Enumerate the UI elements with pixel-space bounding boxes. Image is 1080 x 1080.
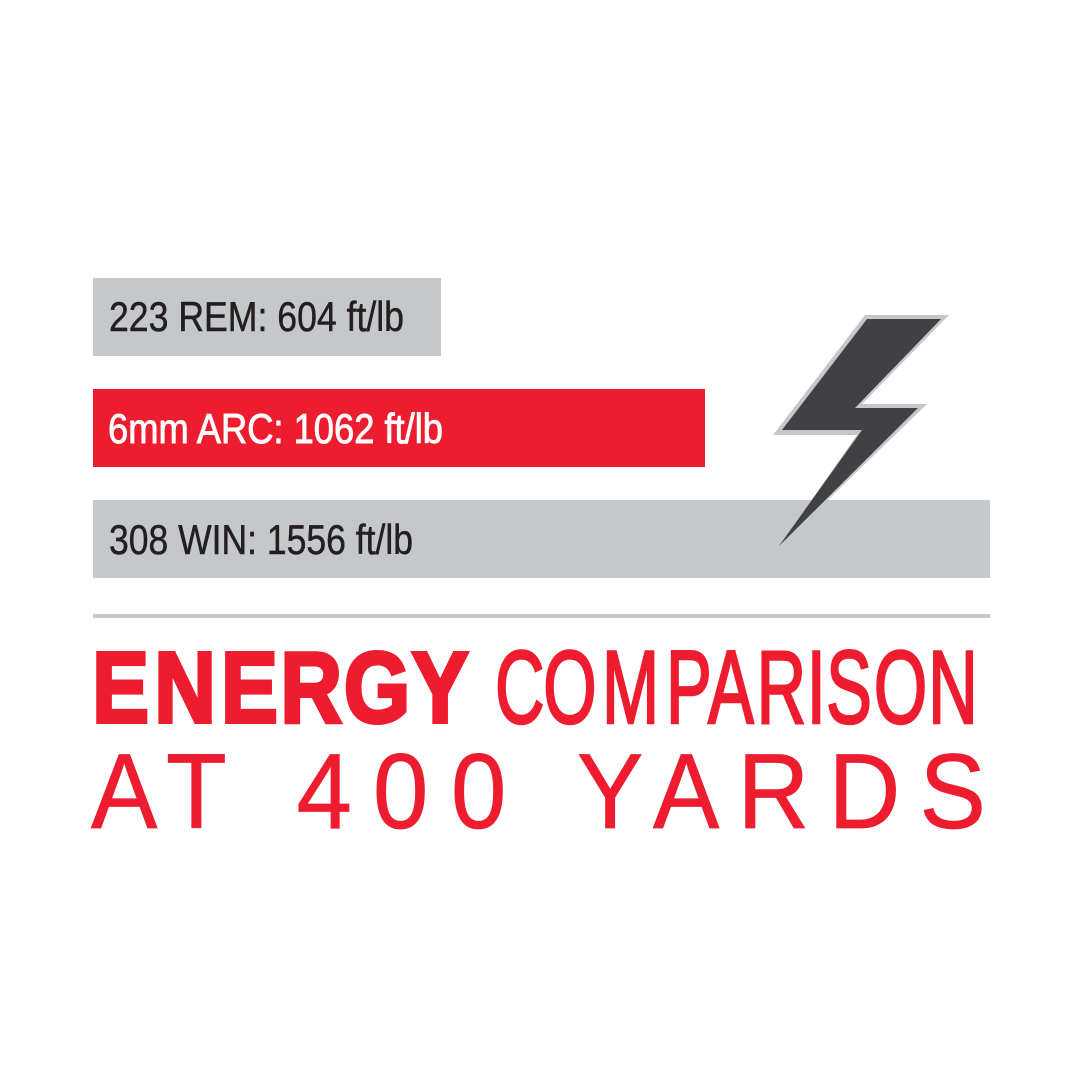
bar: 223 REM: 223 REM: 604 ft/lb <box>109 293 404 340</box>
subtitle: At 400 Yards: AT 400 YARDS <box>91 731 986 851</box>
icon: lightning bolt <box>773 315 949 548</box>
bar: 6mm ARC: 6mm ARC: 1062 ft/lb <box>108 405 443 452</box>
title: Energy Comparison <box>92 629 978 745</box>
bar: 308 WIN: 308 WIN: 1556 ft/lb <box>109 516 413 563</box>
bar: 6mm ARC <box>93 389 705 467</box>
title: Energy Comparison: ENERGY <box>92 631 468 744</box>
bar: 223 REM <box>93 278 441 356</box>
bar: 308 WIN <box>93 500 990 578</box>
title: Energy Comparison: COMPARISON <box>495 629 978 745</box>
